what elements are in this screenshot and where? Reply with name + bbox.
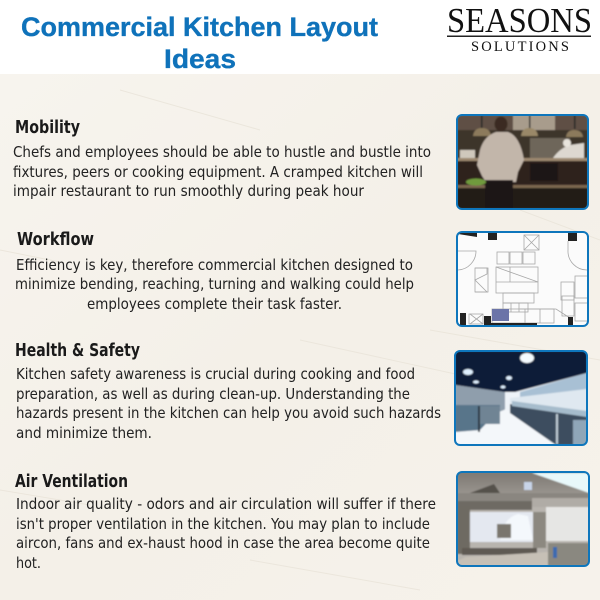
text block: workflow: minimize bending, reaching, turning and walking could help	[15, 275, 414, 293]
title	[21, 12, 378, 74]
logo: Seasons Solutions	[447, 1, 592, 55]
panel: health and safety	[15, 340, 441, 442]
image: kitchen floor plan	[457, 232, 588, 326]
logo: Seasons Solutions: SOLUTIONS	[471, 39, 569, 55]
heading: air ventilation: Air Ventilation	[15, 471, 128, 492]
text block: workflow: Efficiency is key, therefore commercial kitchen designed to	[16, 256, 413, 274]
heading: health and safety: Health & Safety	[15, 340, 140, 361]
text block: health and safety: preparation, as well as during clean-up. Understanding the	[16, 385, 410, 403]
image: chef in kitchen	[457, 115, 588, 209]
logo: Seasons Solutions: SEASONS	[447, 1, 592, 40]
text block: health and safety: hazards present in the kitchen can help you avoid such hazards	[16, 404, 441, 422]
text block: mobility: fixtures, peers or cooking equipment. A cramped kitchen will	[13, 163, 423, 181]
text block: workflow: employees complete their task faster.	[87, 295, 342, 313]
text block: air ventilation: Indoor air quality - odors and air circulation will suffer if there	[16, 495, 436, 513]
text block: mobility: Chefs and employees should be able to hustle and bustle into	[13, 143, 431, 161]
text block: air ventilation: aircon, fans and ex-haust hood in case the area become quite	[16, 534, 430, 552]
image: stainless steel kitchen	[455, 351, 587, 445]
text block: air ventilation: hot.	[16, 554, 41, 572]
heading: mobility: Mobility	[15, 117, 80, 138]
panel: mobility	[13, 117, 431, 200]
text block: air ventilation: isn't proper ventilation in the kitchen. You may plan to include	[16, 515, 430, 533]
text block: workflow	[15, 256, 414, 313]
text block: air ventilation	[16, 495, 436, 572]
image: kitchen exhaust hood	[457, 472, 589, 566]
text block: health and safety: Kitchen safety awareness is crucial during cooking and food	[16, 365, 415, 383]
title: Ideas	[164, 44, 236, 74]
panel: air ventilation	[15, 471, 436, 572]
text block: health and safety: and minimize them.	[16, 424, 152, 442]
heading: workflow: Workflow	[17, 229, 94, 250]
text block: health and safety	[16, 365, 441, 442]
text block: mobility: impair restaurant to run smoothly during peak hour	[13, 182, 365, 200]
title: Commercial Kitchen Layout	[21, 12, 378, 42]
text block: mobility	[13, 143, 431, 200]
panel: workflow	[15, 229, 414, 313]
